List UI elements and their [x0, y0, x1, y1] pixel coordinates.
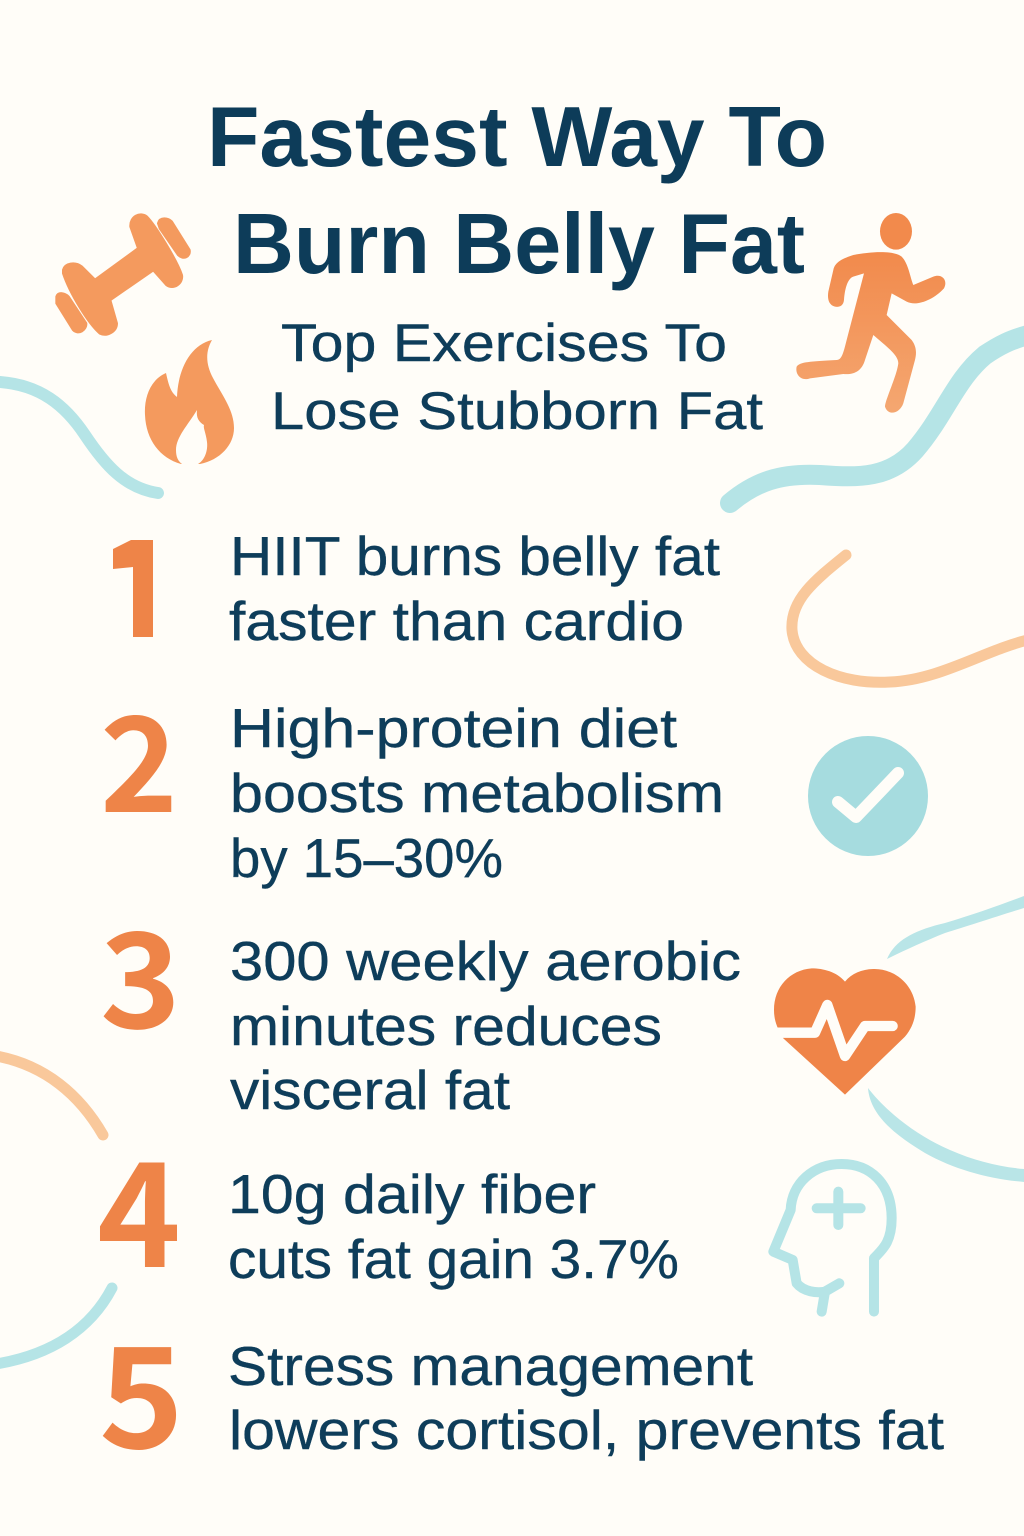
item 1 text — [229, 525, 720, 652]
item 3 text: minutes reduces — [230, 995, 662, 1057]
icon: heart with pulse — [773, 968, 916, 1095]
subtitle — [271, 314, 763, 441]
icon: check circle — [808, 736, 928, 856]
item 1 number: 1 — [112, 485, 168, 676]
item 2 text: boosts metabolism — [230, 762, 724, 824]
item 4 text — [228, 1163, 679, 1290]
item 2 text — [230, 697, 724, 889]
item 5 number: 5 — [99, 1287, 184, 1489]
icon: flame — [145, 340, 234, 464]
item 2 text: by 15–30% — [230, 827, 503, 889]
decorative curve: lower left orange — [0, 1056, 103, 1135]
item 5 text: lowers cortisol, prevents fat — [229, 1399, 944, 1461]
item 4 number: 4 — [97, 1099, 181, 1309]
item 4 text: cuts fat gain 3.7% — [228, 1228, 679, 1290]
icon: runner — [796, 213, 945, 413]
decorative curve: lower left teal — [0, 1288, 112, 1364]
title — [207, 90, 827, 292]
icon: dumbbell — [57, 215, 189, 334]
decorative wave: right lower teal — [868, 1088, 1024, 1182]
item 3 text: visceral fat — [230, 1059, 510, 1121]
item 2 text: High-protein diet — [230, 697, 677, 759]
decorative wave: upper right — [730, 335, 1024, 503]
title: Fastest Way To — [207, 90, 827, 185]
title: Burn Belly Fat — [233, 197, 805, 292]
decorative wave: upper left — [0, 382, 158, 493]
item 3 number: 3 — [100, 876, 181, 1067]
item 4 text: 10g daily fiber — [228, 1163, 596, 1225]
subtitle: Top Exercises To — [281, 314, 727, 373]
item 1 text: HIIT burns belly fat — [230, 525, 720, 587]
item 5 text — [228, 1335, 944, 1461]
item 5 text: Stress management — [228, 1335, 753, 1397]
item 1 text: faster than cardio — [229, 590, 684, 652]
decorative curve: right orange — [792, 555, 1024, 682]
item 2 number: 2 — [100, 660, 178, 851]
item 3 text: 300 weekly aerobic — [230, 930, 741, 992]
icon: head with plus — [773, 1164, 892, 1312]
item 3 text — [230, 930, 741, 1121]
decorative wave: right upper teal — [887, 896, 1024, 959]
subtitle: Lose Stubborn Fat — [271, 382, 763, 441]
